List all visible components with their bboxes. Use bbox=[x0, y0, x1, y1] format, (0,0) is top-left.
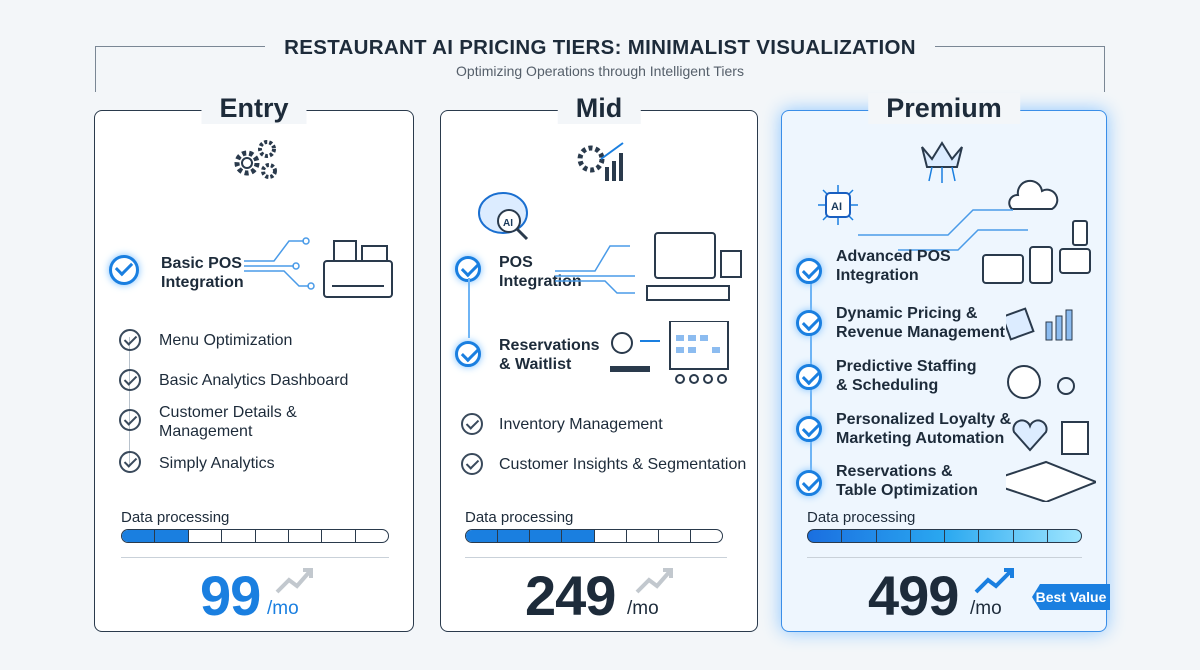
premium features: Integration bbox=[836, 267, 919, 284]
item: basic pos bbox=[104, 237, 393, 298]
heading: Premium: Premium bbox=[886, 93, 1002, 123]
item: POS integration bbox=[450, 232, 742, 301]
checklist: entry: Management bbox=[159, 423, 252, 440]
premium features: Personalized Loyalty & bbox=[836, 411, 1011, 428]
price: 249 bbox=[525, 564, 673, 627]
checklist: entry: Menu Optimization bbox=[159, 332, 292, 349]
item: reservations: & Waitlist bbox=[499, 356, 571, 373]
panel: entry bbox=[94, 110, 414, 632]
item: basic pos: Integration bbox=[161, 274, 244, 291]
price: 499 bbox=[868, 564, 1014, 627]
item: reservations bbox=[450, 321, 729, 384]
price: 249: 249 bbox=[525, 564, 615, 627]
heading: Entry bbox=[201, 93, 307, 124]
premium features bbox=[791, 248, 1096, 502]
item: POS integration: Integration bbox=[499, 273, 582, 290]
premium features: Predictive Staffing bbox=[836, 358, 976, 375]
icon: gears bbox=[234, 140, 277, 179]
icon: gear chart bbox=[578, 142, 624, 181]
premium features: Dynamic Pricing & bbox=[836, 305, 977, 322]
price: 99 bbox=[200, 564, 313, 627]
data processing bar bbox=[121, 509, 389, 543]
price: 99: /mo bbox=[267, 598, 299, 619]
data processing bar bbox=[465, 509, 723, 543]
checklist: entry: Customer Details & bbox=[159, 404, 297, 421]
price: 99: 99 bbox=[200, 564, 260, 627]
item: reservations: Reservations bbox=[499, 337, 600, 354]
icon: AI brain: AI bbox=[503, 218, 513, 229]
badge: best value bbox=[1032, 584, 1110, 610]
premium features: Marketing Automation bbox=[836, 430, 1004, 447]
data processing bar: Data processing bbox=[465, 509, 573, 526]
data processing bar bbox=[807, 509, 1082, 543]
heading: Mid bbox=[558, 93, 640, 124]
item: basic pos: Basic POS bbox=[161, 255, 242, 272]
price: 499: /mo bbox=[970, 598, 1002, 619]
heading: Entry: Entry bbox=[219, 93, 289, 123]
price: 249: /mo bbox=[627, 598, 659, 619]
item: POS integration: POS bbox=[499, 254, 533, 271]
data processing bar: Data processing bbox=[807, 509, 915, 526]
checklist: mid: Customer Insights & Segmentation bbox=[499, 456, 746, 473]
icon: AI brain bbox=[478, 192, 528, 240]
checklist: entry: Simply Analytics bbox=[159, 455, 275, 472]
premium features: Reservations & bbox=[836, 463, 952, 480]
premium features: Revenue Management bbox=[836, 324, 1005, 341]
price: 499: 499 bbox=[868, 564, 958, 627]
title: RESTAURANT AI PRICING TIERS: MINIMALIST VISUALIZATION bbox=[284, 36, 916, 59]
checklist: entry: Basic Analytics Dashboard bbox=[159, 372, 348, 389]
badge: best value: Best Value bbox=[1036, 589, 1106, 605]
header frame bbox=[95, 46, 1105, 92]
icon: crown bbox=[921, 141, 963, 183]
panel: premium bbox=[781, 110, 1107, 632]
data processing bar: Data processing bbox=[121, 509, 229, 526]
heading: Mid: Mid bbox=[576, 93, 622, 123]
checklist: entry bbox=[119, 329, 348, 473]
checklist: mid: Inventory Management bbox=[499, 416, 663, 433]
icon: AI chip + cloud devices: AI bbox=[831, 201, 842, 213]
icon: AI chip + cloud devices bbox=[818, 180, 1091, 284]
premium features: Table Optimization bbox=[836, 482, 978, 499]
premium features: Advanced POS bbox=[836, 248, 951, 265]
premium features: & Scheduling bbox=[836, 377, 938, 394]
checklist: mid bbox=[461, 413, 746, 475]
panel: mid bbox=[440, 110, 758, 632]
subtitle: Optimizing Operations through Intelligent Tiers bbox=[456, 63, 744, 79]
